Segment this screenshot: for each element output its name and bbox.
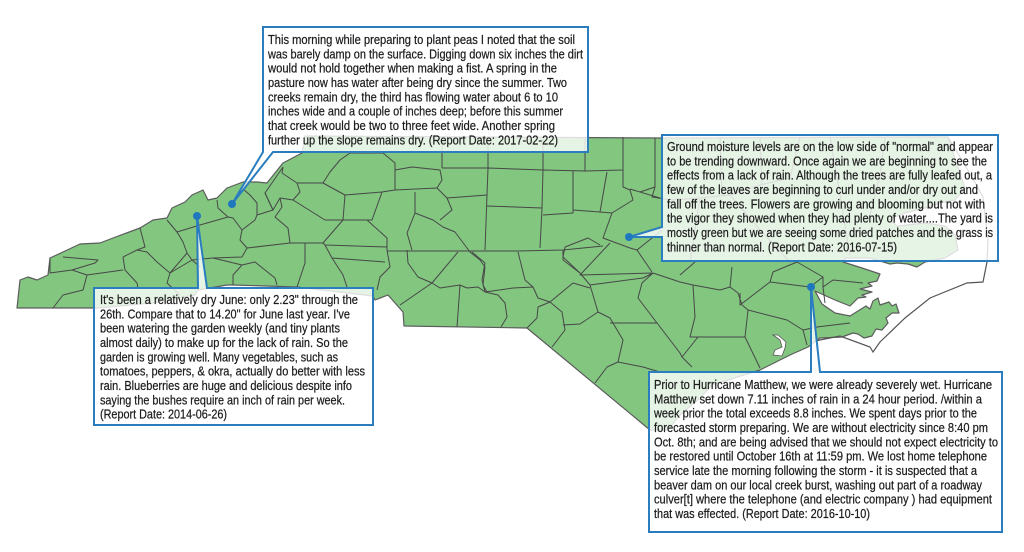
location dot bbox=[625, 233, 633, 241]
report text: Prior to Hurricane Matthew, we were already severely wet. Hurricane bbox=[654, 378, 992, 392]
report text: 26th. Compare that to 14.20" for June last year. I've bbox=[100, 307, 350, 321]
report text: rain. Blueberries are huge and delicious despite info bbox=[100, 379, 352, 393]
callout: soil report 2017-02-22 bbox=[228, 27, 588, 208]
report text: It's been a relatively dry June: only 2.23" through the bbox=[100, 293, 358, 307]
report text: saying the bushes require an inch of rain per week. bbox=[100, 393, 345, 407]
report text: culver[t] where the telephone (and electric company ) had equipment bbox=[654, 493, 992, 507]
report text: to be trending downward. Once again we are beginning to see the bbox=[667, 154, 987, 168]
report text: would not hold together when making a fist. A spring in the bbox=[267, 62, 557, 76]
report text: that was effected. (Report Date: 2016-10-10) bbox=[654, 507, 870, 521]
report text: Matthew set down 7.11 inches of rain in a 24 hour period. /within a bbox=[654, 392, 982, 406]
map: North Carolina counties bbox=[17, 136, 988, 430]
callout box with leader bbox=[629, 135, 998, 261]
callout: ground moisture report 2016-07-15 bbox=[625, 135, 998, 261]
report text: tomatoes, peppers, & okra, actually do better with less bbox=[100, 365, 365, 379]
report text: forecasted storm preparing. We are without electricity since 8:40 pm bbox=[654, 421, 988, 435]
report text: few of the leaves are beginning to curl under and/or dry out and bbox=[667, 183, 978, 197]
location dot bbox=[228, 200, 236, 208]
report text: effects from a lack of rain. Although the trees are fully leafed out, a bbox=[667, 169, 992, 183]
county boundaries bbox=[50, 137, 885, 383]
outer banks barrier islands bbox=[815, 137, 988, 352]
report text: fall off the trees. Flowers are growing and blooming but not with bbox=[667, 197, 985, 211]
report text: garden is growing well. Many vegetables, such as bbox=[100, 350, 338, 364]
report text: the vigor they showed when they had plenty of water....The yard is bbox=[667, 212, 993, 226]
callout: Hurricane Matthew report 2016-10-10 bbox=[649, 283, 1002, 532]
report text: week prior the total exceeds 8.8 inches. We spent days prior to the bbox=[653, 407, 977, 421]
report text: beaver dam on our local creek burst, washing out part of a roadway bbox=[654, 478, 983, 492]
report text: that creek would be two to three feet wide. Another spring bbox=[268, 119, 555, 133]
callout box with leader bbox=[649, 287, 1002, 532]
report text: pasture now has water after being dry since the summer. Two bbox=[268, 76, 567, 90]
report text: thinner than normal. (Report Date: 2016-07-15) bbox=[667, 240, 897, 254]
location dot bbox=[807, 283, 815, 291]
New River inlet bbox=[773, 335, 786, 356]
report text: be restored until October 16th at 11:59 pm. We lost home telephone bbox=[654, 450, 987, 464]
report text: almost daily) to make up for the lack of rain. So the bbox=[100, 336, 348, 350]
callout: dry June report 2014-06-26 bbox=[94, 212, 373, 425]
callout box with leader bbox=[94, 216, 373, 425]
report text: This morning while preparing to plant peas I noted that the soil bbox=[268, 33, 575, 47]
report text: been watering the garden weekly (and tiny plants bbox=[100, 322, 340, 336]
report text: creeks remain dry, the third has flowing water about 6 to 10 bbox=[268, 90, 558, 104]
state land area bbox=[17, 136, 965, 430]
report text: service late the morning following the storm - it is suspected that a bbox=[654, 464, 977, 478]
report text: (Report Date: 2014-06-26) bbox=[100, 408, 227, 422]
report text: inches wide and a couple of inches deep; before this summer bbox=[268, 105, 563, 119]
report text: was barely damp on the surface. Digging down six inches the dirt bbox=[267, 47, 583, 61]
callout box with leader bbox=[232, 27, 588, 204]
location dot bbox=[193, 212, 201, 220]
report text: further up the slope remains dry. (Report Date: 2017-02-22) bbox=[268, 133, 558, 147]
